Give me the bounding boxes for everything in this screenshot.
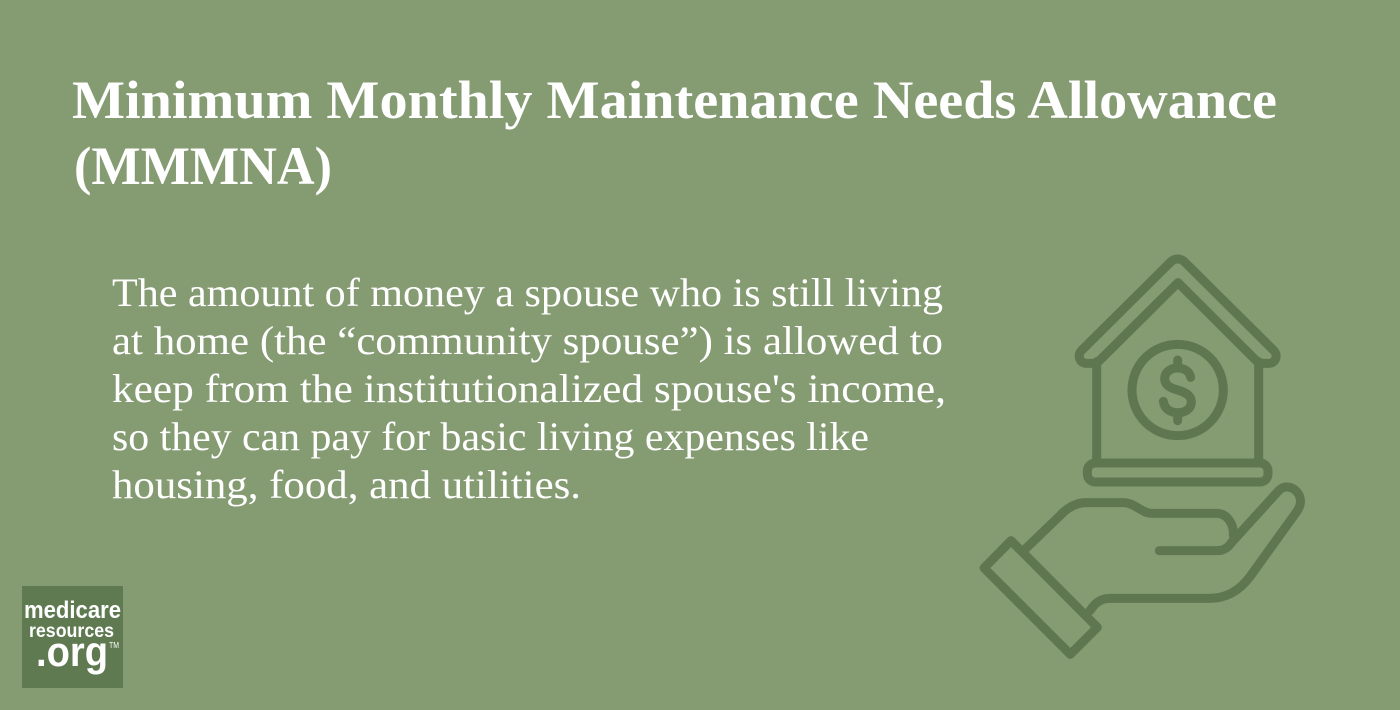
icon part: dollar coin: [1132, 344, 1223, 436]
logo: medicareresources.org: [22, 586, 123, 688]
body text: MMMNA definition: keep from the institutionalized spouse's income,: [112, 366, 946, 411]
icon part: house roof: [1079, 259, 1276, 363]
icon part: open hand and cuff: [984, 487, 1300, 654]
title: (MMMNA): [74, 136, 332, 196]
body text: MMMNA definition: [112, 270, 946, 507]
title: Minimum Monthly Maintenance Needs Allowance: [72, 70, 1277, 130]
title: [72, 70, 1277, 196]
icon: hand holding house with dollar sign: [984, 259, 1300, 654]
body text: MMMNA definition: housing, food, and utilities.: [112, 462, 581, 507]
logo: medicareresources.org: medicare: [24, 597, 121, 624]
body text: MMMNA definition: so they can pay for basic living expenses like: [112, 414, 869, 459]
logo background: [22, 586, 123, 688]
body text: MMMNA definition: The amount of money a spouse who is still living: [112, 270, 943, 315]
logo: medicareresources.org: .org: [36, 628, 108, 675]
logo: medicareresources.org: TM: [109, 641, 119, 650]
logo: medicareresources.org: resources: [29, 621, 114, 642]
icon part: house walls and base: [1087, 362, 1268, 482]
body text: MMMNA definition: at home (the “community spouse”) is allowed to: [112, 318, 943, 363]
